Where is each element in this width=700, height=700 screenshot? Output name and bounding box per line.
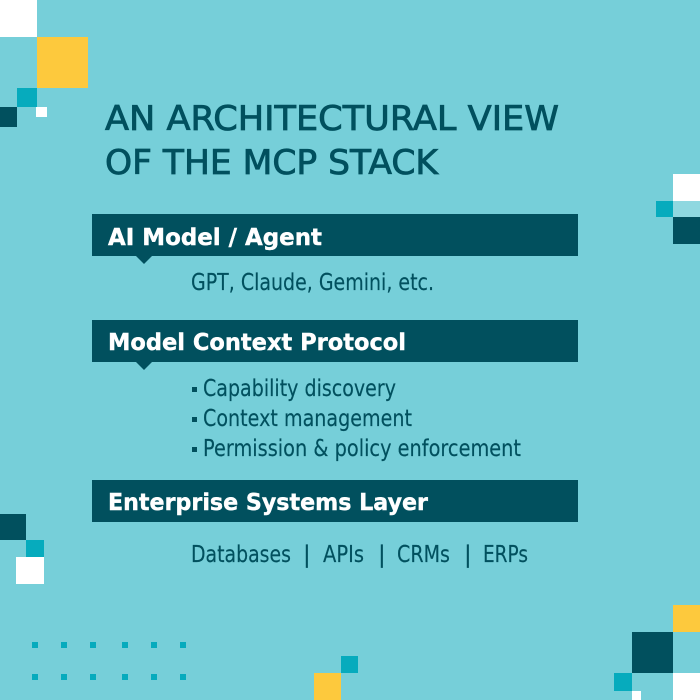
header bar: Enterprise Systems Layer [92,480,578,522]
bullet list: protocol functions: Capability discovery [203,376,396,402]
text: enterprise systems: APIs [323,542,364,568]
panel: AI Model / Agent [92,214,578,296]
text: model examples: GPT, Claude, Gemini, etc. [191,270,434,296]
title: OF THE MCP STACK [105,143,440,183]
heading: Model Context Protocol: Model Context Protocol [108,330,406,356]
panel: Model Context Protocol [92,320,578,462]
bullet list: protocol functions [192,376,521,462]
header bar: Model Context Protocol [92,320,578,370]
text: enterprise systems: CRMs [397,542,450,568]
decorative squares: lower left [0,514,44,584]
title: AN ARCHITECTURAL VIEW [105,99,559,139]
title [105,99,559,183]
text: enterprise systems: | [464,542,472,568]
decorative squares: bottom centre [314,656,358,700]
heading: Enterprise Systems Layer: Enterprise Systems Layer [108,490,429,516]
panel: Enterprise Systems Layer [92,480,578,568]
text: enterprise systems: | [378,542,386,568]
decorative squares: top left [0,0,88,127]
text: enterprise systems: | [303,542,311,568]
decorative squares: right [656,174,700,244]
text: enterprise systems [191,542,528,568]
bullet list: protocol functions: Context management [203,406,412,432]
text: enterprise systems: ERPs [483,542,528,568]
decorative squares: bottom right [614,605,700,700]
text: enterprise systems: Databases [191,542,291,568]
header bar: AI Model / Agent [92,214,578,264]
bullet list: protocol functions: Permission & policy enforcement [203,436,521,462]
heading: AI Model / Agent: AI Model / Agent [108,225,322,251]
decorative dot grid [32,642,186,680]
